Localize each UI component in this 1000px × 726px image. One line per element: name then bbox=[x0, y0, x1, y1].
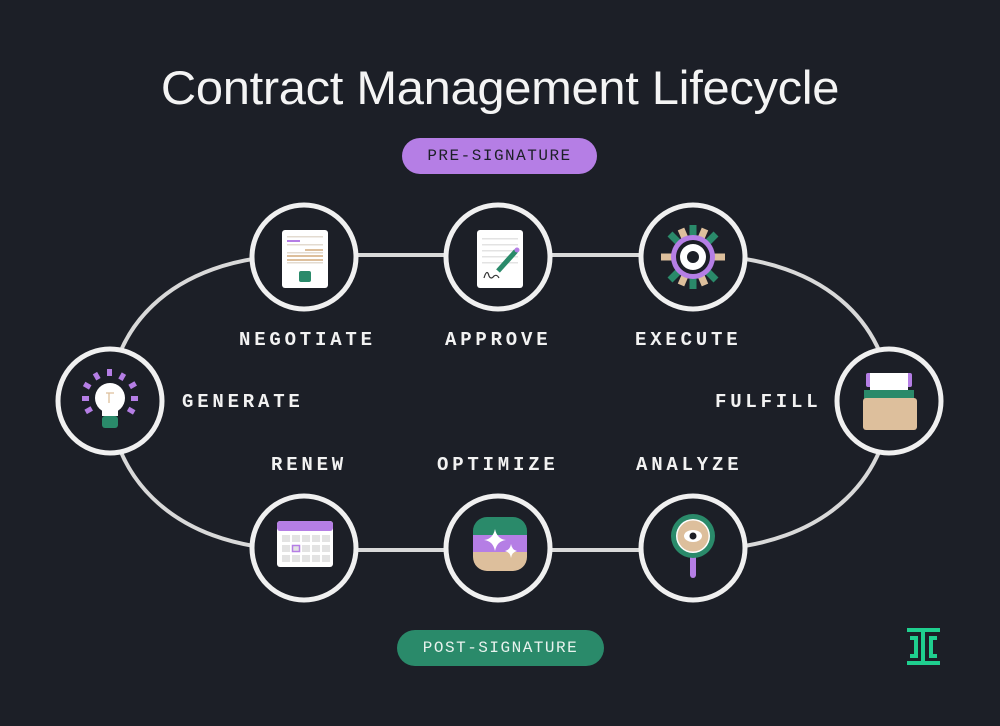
icon: calendar bbox=[277, 521, 333, 567]
logo bbox=[907, 630, 940, 663]
text: FULFILL bbox=[715, 391, 821, 413]
pill: post-signature: POST-SIGNATURE bbox=[423, 639, 578, 657]
icon: approve document bbox=[477, 230, 523, 288]
icon: execute gear bbox=[661, 225, 725, 289]
text: APPROVE bbox=[445, 329, 551, 351]
pill: pre-signature bbox=[402, 138, 597, 174]
text: RENEW bbox=[271, 454, 347, 476]
title: Contract Management Lifecycle bbox=[161, 61, 839, 114]
text: GENERATE bbox=[182, 391, 304, 413]
icon: analyze magnifier bbox=[671, 514, 715, 578]
icon: folder bbox=[863, 373, 917, 430]
text: OPTIMIZE bbox=[437, 454, 559, 476]
icon: negotiate document bbox=[282, 230, 328, 288]
text: ANALYZE bbox=[636, 454, 742, 476]
pill: post-signature bbox=[397, 630, 604, 666]
icon: optimize sparkles bbox=[473, 517, 527, 571]
lifecycle diagram bbox=[56, 202, 944, 665]
labels: NEGOTIATE bbox=[239, 329, 376, 351]
pill: pre-signature: PRE-SIGNATURE bbox=[427, 147, 572, 165]
text: EXECUTE bbox=[635, 329, 741, 351]
icon: lightbulb bbox=[82, 369, 138, 428]
